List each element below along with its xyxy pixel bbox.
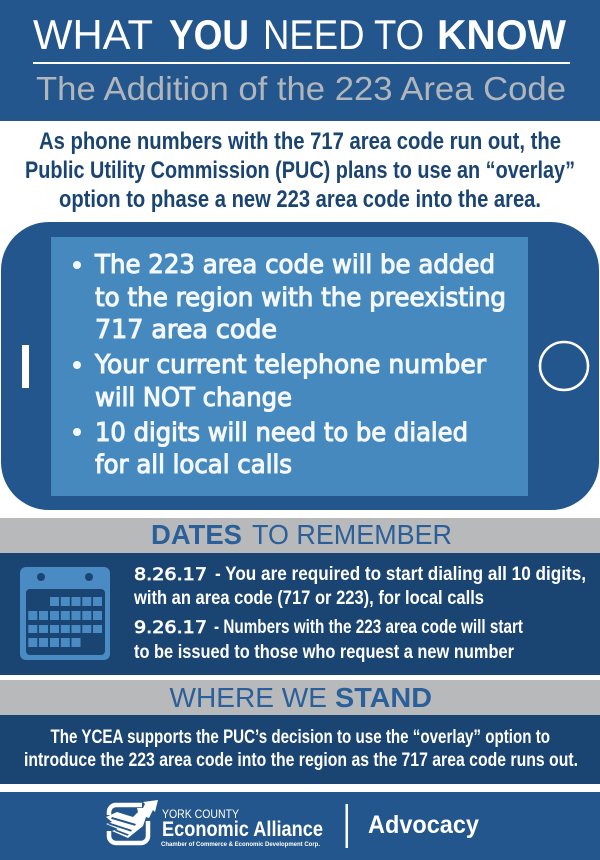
panel: where we stand heading: WHERE WE <box>170 682 327 713</box>
logo wordmark: YORK COUNTY <box>162 807 239 821</box>
date text <box>133 564 586 663</box>
advocacy label: Advocacy <box>368 811 479 839</box>
panel: where we stand heading <box>0 680 600 715</box>
intro text <box>25 128 575 213</box>
bullet list: to the region with the preexisting <box>95 283 506 313</box>
bullet list: The 223 area code will be added <box>94 250 495 280</box>
icon: York County Economic Alliance logo <box>106 800 158 843</box>
icon: calendar <box>20 567 110 660</box>
title: YOU <box>169 11 249 58</box>
logo wordmark <box>161 807 323 848</box>
bullet list: Your current telephone number <box>94 350 486 380</box>
bullet list: for all local calls <box>95 450 292 480</box>
panel: footer <box>0 792 600 860</box>
title: WHAT <box>33 11 153 58</box>
panel: where we stand text <box>0 715 600 784</box>
date text: - Numbers with the 223 area code will start <box>214 617 524 638</box>
title: NEED TO <box>263 11 424 58</box>
panel: dates <box>0 553 600 675</box>
date text: 8.26.17 <box>134 565 207 585</box>
date text: 9.26.17 <box>134 618 207 638</box>
title <box>33 11 566 58</box>
date text: with an area code (717 or 223), for local calls <box>133 588 484 609</box>
panel: dates heading: TO REMEMBER <box>252 519 452 550</box>
panel: where we stand heading: STAND <box>335 682 432 713</box>
bullet list: 10 digits will need to be dialed <box>95 418 468 448</box>
bullet list: 717 area code <box>95 315 277 345</box>
logo wordmark: Economic Alliance <box>162 818 323 841</box>
title: KNOW <box>437 11 566 58</box>
bullet list: will NOT change <box>95 383 292 413</box>
panel: dates heading <box>0 518 600 553</box>
icon: phone speaker <box>22 345 29 388</box>
panel: header <box>0 0 600 121</box>
subtitle: The Addition of the 223 Area Code <box>36 70 566 107</box>
logo wordmark: Chamber of Commerce & Economic Development Corp. <box>161 841 320 848</box>
date text: to be issued to those who request a new number <box>134 642 515 663</box>
phone screen <box>51 237 528 496</box>
panel: dates heading: DATES <box>151 519 242 550</box>
panel: phone <box>1 222 599 510</box>
bullet list <box>73 250 506 480</box>
icon: phone home button <box>540 342 588 390</box>
